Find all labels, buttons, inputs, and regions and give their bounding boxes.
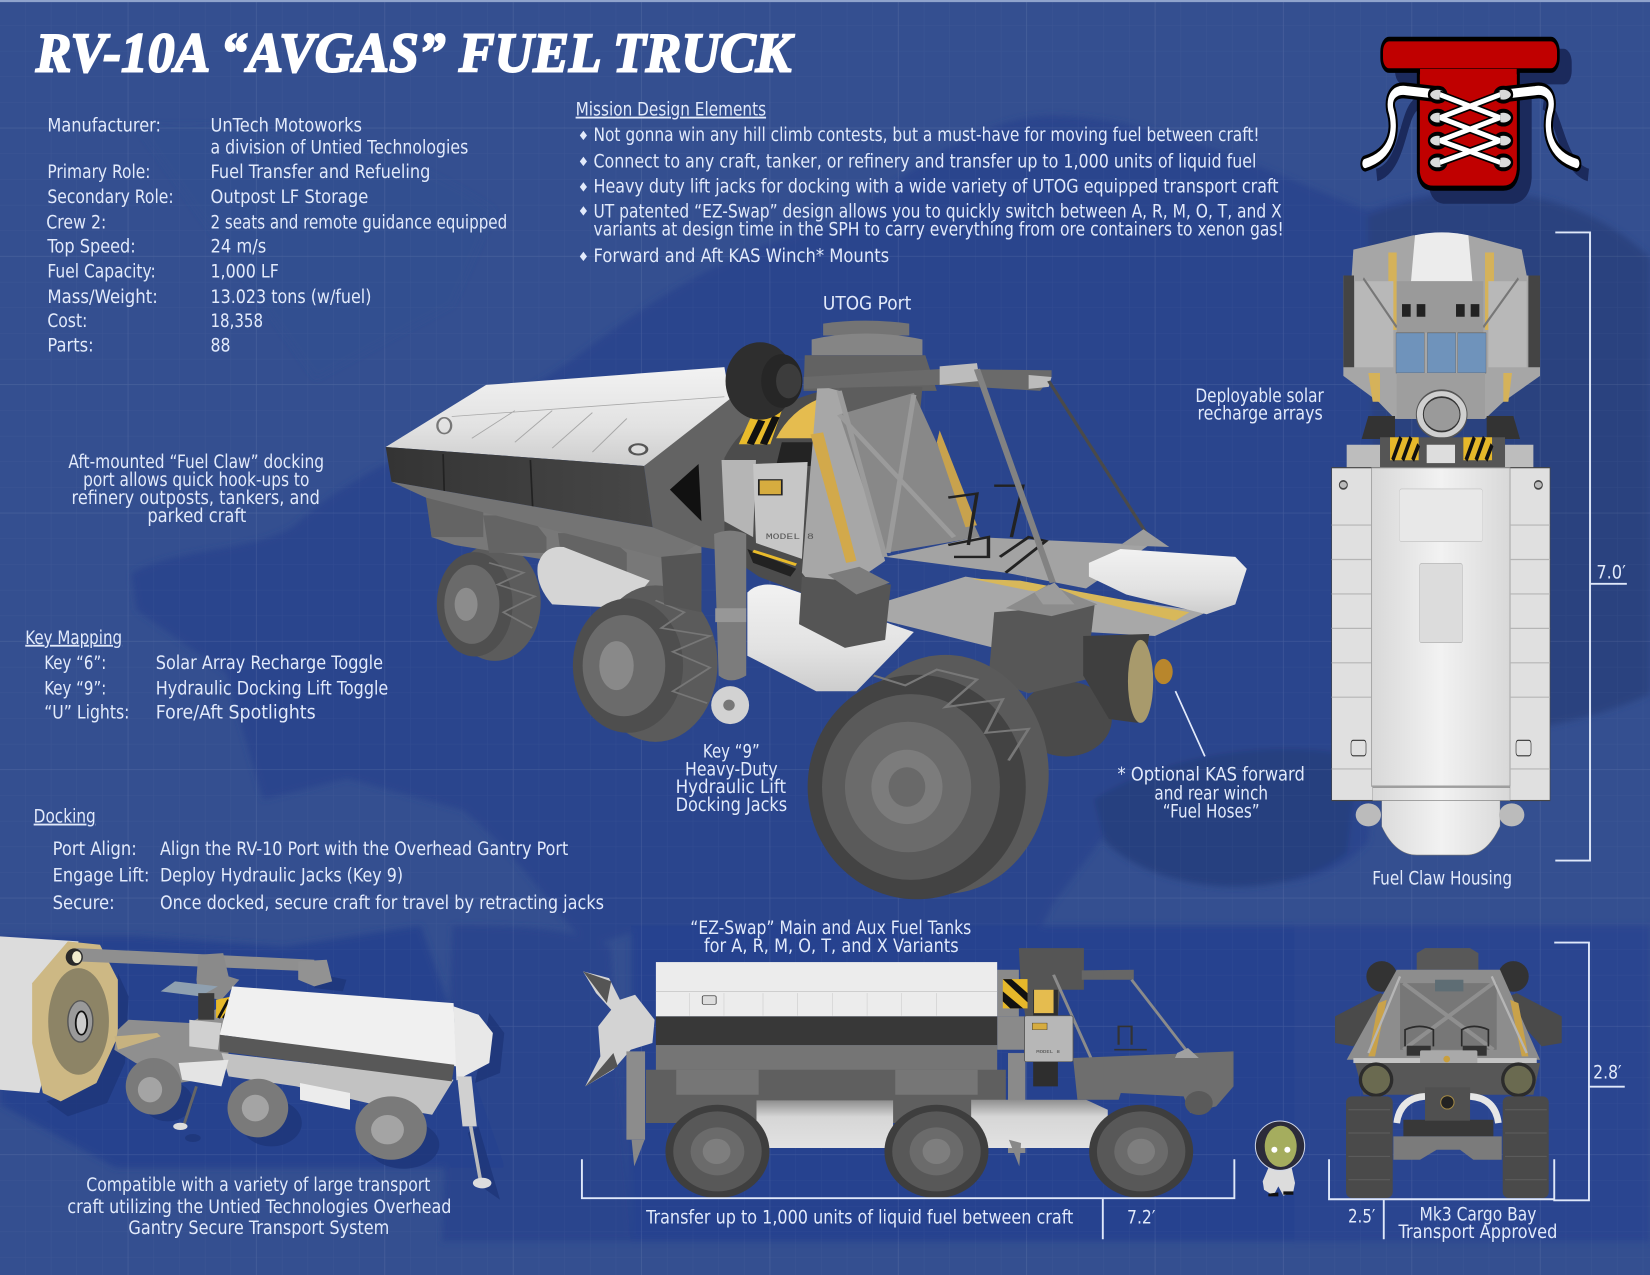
cab cylinder <box>724 391 822 600</box>
legs <box>457 1076 477 1126</box>
seat <box>1114 1026 1147 1050</box>
drop shadows <box>46 973 504 1200</box>
tank <box>656 962 997 1016</box>
spec values: 13.023 tons (w/fuel) <box>210 287 371 308</box>
label: fuel claw docking: parked craft <box>147 506 246 527</box>
label: gantry compatibility: craft utilizing the Untied Technologies Overhead <box>67 1197 451 1218</box>
spec values: 1,000 LF <box>210 262 279 283</box>
label: UTOG port: UTOG Port <box>823 293 911 314</box>
label: hydraulic jacks: Heavy-Duty <box>685 759 778 780</box>
spec labels: Cost: <box>47 311 87 332</box>
spec labels: Primary Role: <box>47 162 150 183</box>
docking rows: Port Align: <box>53 839 137 860</box>
dimension: 2.8 feet: 2.8′ <box>1593 1062 1622 1083</box>
label: solar arrays: Deployable solar <box>1195 386 1324 407</box>
dimension: 7.2 feet <box>582 1159 1234 1239</box>
spare wheel <box>726 342 802 420</box>
label: EZ-Swap tanks: “EZ-Swap” Main and Aux Fuel Tanks <box>690 918 971 939</box>
tank dark band <box>386 447 653 527</box>
docking <box>34 807 604 914</box>
docking rows: Align the RV-10 Port with the Overhead Gantry Port <box>160 839 568 860</box>
console <box>1353 1058 1537 1063</box>
label: fuel claw docking: Aft-mounted “Fuel Claw” docking <box>68 452 324 473</box>
spec labels: Mass/Weight: <box>47 287 158 308</box>
transport cylinder <box>0 936 79 1093</box>
spec labels <box>46 115 174 356</box>
spec values <box>210 115 507 356</box>
label: fuel claw docking: refinery outposts, tankers, and <box>72 488 320 509</box>
storage box: MODEL 8 <box>766 533 814 542</box>
hull below tank <box>391 482 699 561</box>
label: Mk3 cargo bay: Transport Approved <box>1398 1222 1557 1243</box>
tank arc <box>1397 1096 1498 1123</box>
middle wheel <box>573 585 718 742</box>
dark side wings <box>1335 993 1397 1046</box>
label: hydraulic jacks <box>676 741 787 816</box>
tank top <box>386 367 731 466</box>
winch mount <box>1425 1087 1470 1121</box>
label: hydraulic jacks: Key “9” <box>703 741 760 762</box>
spec labels: Secondary Role: <box>47 187 174 208</box>
label: EZ-Swap tanks: for A, R, M, O, T, and X Variants <box>704 936 959 957</box>
mission bullets: Forward and Aft KAS Winch* Mounts <box>593 246 889 267</box>
mission bullets: variants at design time in the SPH to carry everything from ore containers to xenon gas! <box>593 220 1284 241</box>
top view of truck <box>1332 232 1550 855</box>
spec values: Fuel Transfer and Refueling <box>210 162 430 183</box>
mission bullets: Not gonna win any hill climb contests, but a must-have for moving fuel between craft! <box>593 125 1260 146</box>
dimension: 7.2 feet: 7.2′ <box>1127 1207 1155 1228</box>
cab rear <box>997 970 1019 1016</box>
spec labels: Crew 2: <box>46 212 106 233</box>
mission design elements <box>576 100 1284 267</box>
docking rows: Once docked, secure craft for travel by retracting jacks <box>160 893 604 914</box>
UTOG port <box>804 321 937 419</box>
spec values: a division of Untied Technologies <box>210 138 468 159</box>
spec table <box>46 115 507 356</box>
side frame with window <box>644 399 759 553</box>
chassis <box>646 1070 1006 1123</box>
label: solar arrays: recharge arrays <box>1198 404 1323 425</box>
docking jack <box>711 531 749 724</box>
key mapping rows: Hydraulic Docking Lift Toggle <box>156 678 388 699</box>
icon: kerbal astronaut <box>1255 1121 1305 1196</box>
spec labels: Top Speed: <box>46 236 136 257</box>
mission bullets: ♦ <box>578 154 589 169</box>
solar array <box>161 981 218 996</box>
docking heading: Docking <box>34 807 96 828</box>
struts <box>977 369 1053 583</box>
far front wheel <box>1020 681 1112 757</box>
docking rows: Deploy Hydraulic Jacks (Key 9) <box>160 866 403 887</box>
dimension: 7.0 feet: 7.0′ <box>1596 563 1626 584</box>
hazard <box>1003 979 1028 1008</box>
label: hydraulic jacks: Docking Jacks <box>676 795 787 816</box>
title: RV-10A “AVGAS” FUEL TRUCK <box>35 23 795 85</box>
rear wheel <box>437 544 541 661</box>
mission bullets: UT patented “EZ-Swap” design allows you to quickly switch between A, R, M, O, T, and X <box>593 202 1282 223</box>
key mapping rows <box>44 653 388 724</box>
key mapping rows: Solar Array Recharge Toggle <box>156 653 383 674</box>
hazard stripes <box>739 411 782 444</box>
label: fuel claw housing: Fuel Claw Housing <box>1372 869 1512 890</box>
spec labels: Parts: <box>47 335 94 356</box>
spec values: 2 seats and remote guidance equipped <box>210 212 507 233</box>
fuel cylinders <box>756 1100 893 1148</box>
label: gantry compatibility: Gantry Secure Transport System <box>128 1218 389 1239</box>
key mapping rows: Key “9”: <box>44 678 106 699</box>
tyres <box>1346 1096 1393 1198</box>
storage box <box>1024 1016 1073 1062</box>
axle <box>1393 1136 1502 1160</box>
spec values: UnTech Motoworks <box>210 115 362 136</box>
seats <box>948 486 1046 573</box>
label: optional KAS winch: and rear winch <box>1154 784 1268 805</box>
label: EZ-Swap tanks <box>690 918 971 957</box>
spec values: 18,358 <box>210 311 263 332</box>
jacks <box>626 1051 645 1140</box>
spec values: Outpost LF Storage <box>210 187 368 208</box>
label: hydraulic jacks: Hydraulic Lift <box>676 777 786 798</box>
tower <box>1347 970 1540 1060</box>
spec labels: Fuel Capacity: <box>47 262 156 283</box>
mission bullets: ♦ <box>578 179 589 194</box>
fuel claw <box>1373 787 1510 855</box>
dimension: 2.8 feet <box>1554 943 1625 1200</box>
tank <box>220 986 456 1066</box>
logo: Untied Technologies <box>1365 39 1588 204</box>
dark skirts and hazards <box>1362 416 1520 439</box>
round hatch <box>1416 390 1467 438</box>
key mapping <box>25 628 388 724</box>
overhead arm <box>804 369 1052 391</box>
tank <box>1332 468 1550 801</box>
label: optional KAS winch: “Fuel Hoses” <box>1163 801 1260 822</box>
label: Mk3 cargo bay: Mk3 Cargo Bay <box>1420 1204 1536 1225</box>
spare wheels <box>1366 961 1397 992</box>
mission bullets: ♦ <box>578 249 589 264</box>
label: fuel claw docking: port allows quick hook-ups to <box>83 470 309 491</box>
chassis rear <box>426 494 701 600</box>
seats <box>1405 1026 1488 1046</box>
mission heading: Mission Design Elements <box>576 100 766 121</box>
gantry arm <box>77 948 314 971</box>
callout line: winch <box>1175 691 1205 756</box>
columns <box>661 553 701 612</box>
key mapping rows: Fore/Aft Spotlights <box>156 703 316 724</box>
dimension: 7.0 feet <box>1555 232 1627 861</box>
spec labels: Manufacturer: <box>47 115 161 136</box>
front bumper <box>1089 549 1247 614</box>
mission bullets: ♦ <box>578 204 589 219</box>
front wheel <box>808 655 1049 899</box>
dimension: 2.5 feet <box>1329 1159 1554 1239</box>
hazard lower <box>747 549 796 577</box>
label: transfer capacity: Transfer up to 1,000 units of liquid fuel between craft <box>645 1207 1073 1228</box>
storage box: MODEL 8 <box>1036 1050 1060 1055</box>
front view of truck <box>1335 948 1562 1198</box>
label: gantry compatibility <box>67 1175 451 1239</box>
spec values: 24 m/s <box>210 236 266 257</box>
lower chassis <box>1355 1063 1540 1095</box>
wheels <box>126 1058 427 1160</box>
side view of truck <box>583 948 1234 1198</box>
fuel claw <box>583 971 655 1086</box>
cab top <box>1343 235 1540 419</box>
main truck illustration <box>386 321 1247 899</box>
UTOG port <box>1417 948 1478 970</box>
gantry transport illustration <box>0 936 504 1200</box>
cab and chassis <box>114 1006 229 1083</box>
docking rows <box>53 839 604 914</box>
docking rows: Secure: <box>53 893 115 914</box>
label: solar arrays <box>1195 386 1324 425</box>
fuel cylinders <box>537 547 650 608</box>
key mapping rows: Key “6”: <box>44 653 106 674</box>
spec values: 88 <box>210 335 230 356</box>
label: gantry compatibility: Compatible with a variety of large transport <box>86 1175 430 1196</box>
deck upper <box>885 537 1149 589</box>
label: optional KAS winch <box>1118 765 1305 822</box>
tower <box>802 385 885 602</box>
dimension: 2.5 feet: 2.5′ <box>1348 1206 1375 1227</box>
mission bullets: Connect to any craft, tanker, or refinery and transfer up to 1,000 units of liquid fuel <box>593 151 1256 172</box>
wheels <box>665 1105 1193 1198</box>
deck lower <box>851 577 1207 648</box>
storage box <box>722 460 814 559</box>
label: Mk3 cargo bay <box>1398 1204 1557 1243</box>
label: optional KAS winch: * Optional KAS forward <box>1118 765 1305 786</box>
label: fuel claw docking <box>68 452 324 527</box>
mission bullets: ♦ <box>578 128 589 143</box>
arm and struts <box>1082 970 1134 980</box>
solar panels <box>1396 333 1486 373</box>
knobs <box>1402 304 1479 317</box>
mission bullets: Heavy duty lift jacks for docking with a wide variety of UTOG equipped transport craft <box>593 177 1279 198</box>
docking rows: Engage Lift: <box>53 866 149 887</box>
key mapping heading: Key Mapping <box>25 628 122 649</box>
headlights <box>1359 1062 1393 1097</box>
mission bullets <box>578 125 1284 267</box>
key mapping rows: “U” Lights: <box>44 703 129 724</box>
front chassis <box>1073 1051 1234 1113</box>
